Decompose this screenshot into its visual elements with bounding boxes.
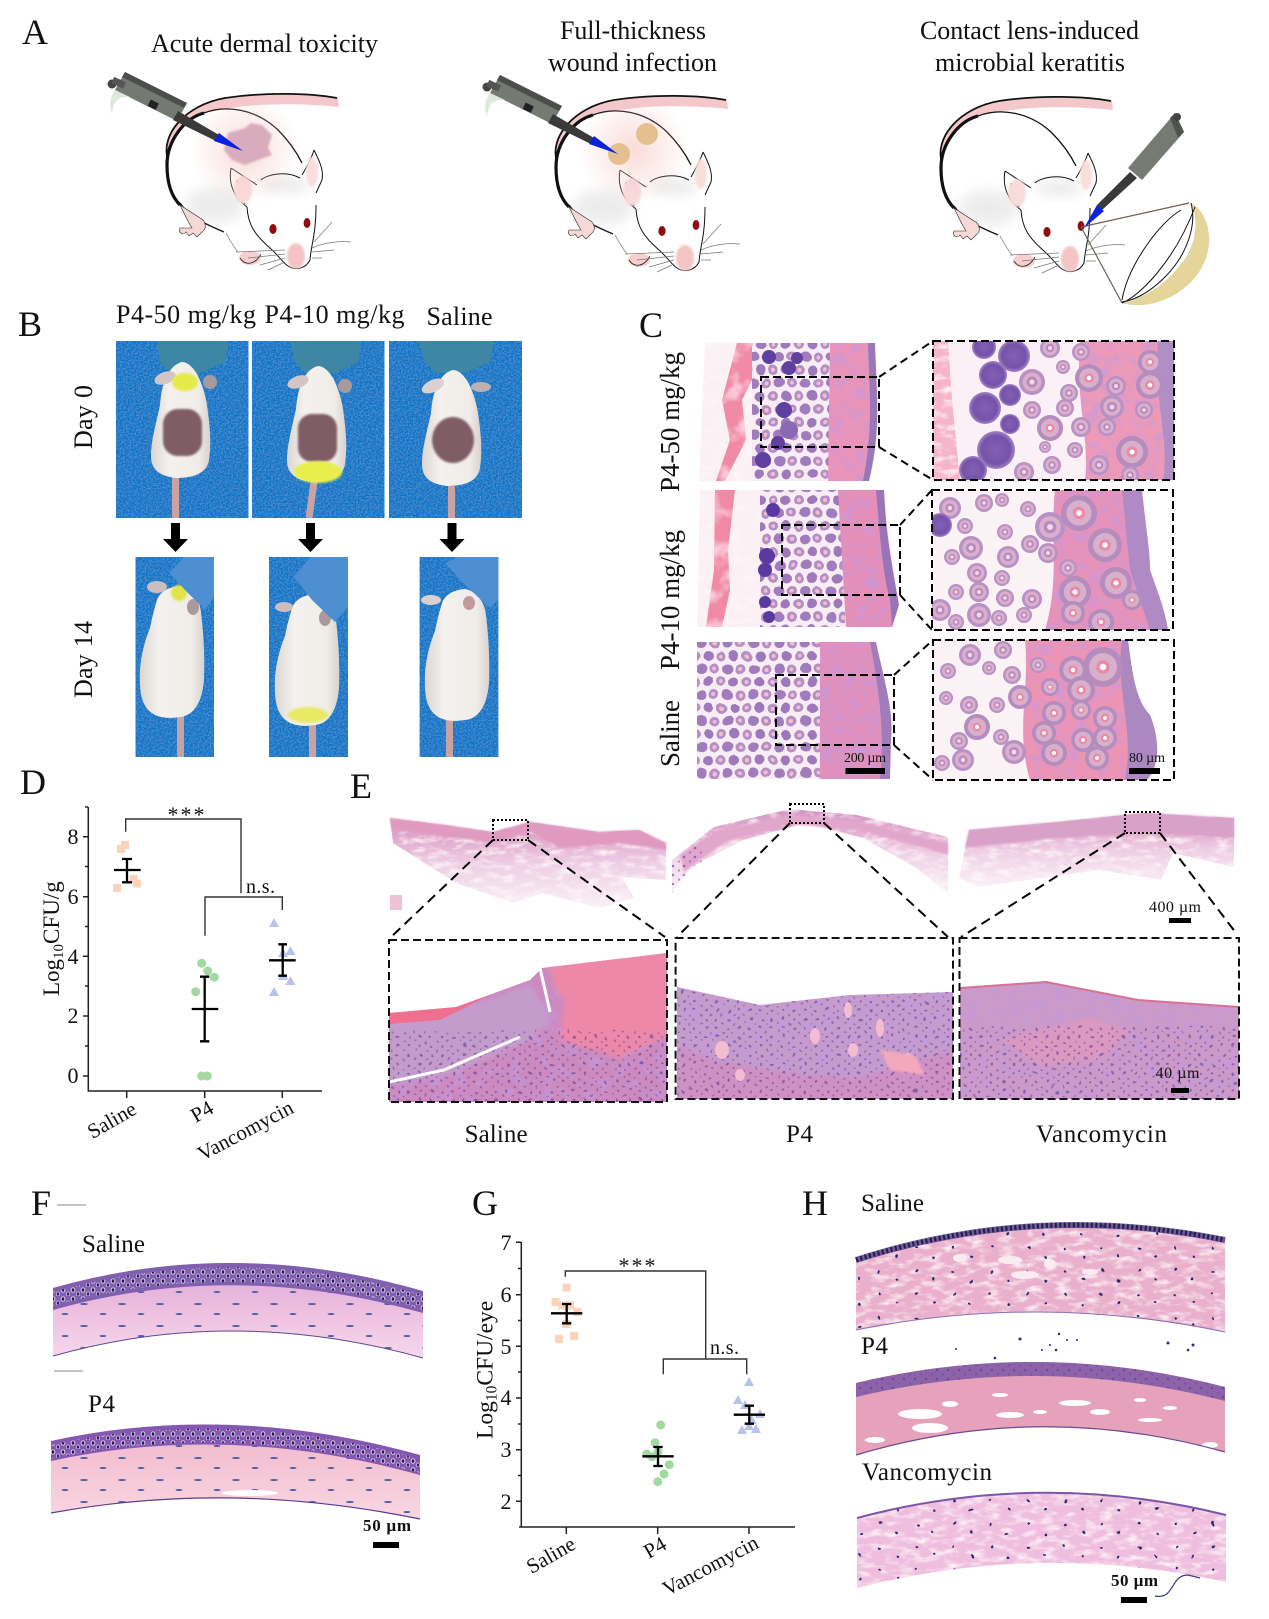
illustration: mouse with wound infection sites — [482, 75, 740, 272]
panel A: mouse models — [22, 12, 1209, 305]
panel B: mouse photographs — [18, 300, 522, 757]
panel letter B: B — [18, 304, 42, 344]
arrow 3 — [440, 523, 464, 552]
y tick labels: 7 — [500, 1230, 512, 1255]
label saline: Saline — [861, 1190, 924, 1217]
magnified saline — [380, 940, 675, 1110]
stray cell dots — [955, 1333, 1194, 1359]
x labels: P4 — [186, 1095, 218, 1127]
axes and ticks — [516, 1242, 795, 1534]
histology overview P4-10 — [697, 485, 899, 635]
panel letter C: C — [639, 305, 663, 345]
P4 data points — [191, 959, 219, 1080]
vancomycin data points — [269, 918, 296, 996]
y tick labels: 3 — [500, 1437, 512, 1462]
saline data points — [552, 1284, 582, 1343]
arrow 1 — [163, 523, 188, 552]
panel F: healthy cornea histology — [31, 1183, 423, 1548]
label saline: Saline — [82, 1231, 145, 1258]
scale bar 400 um: 400 µm — [1149, 899, 1202, 916]
small image artifacts — [54, 1205, 86, 1371]
scale bar 40 um — [1156, 1065, 1200, 1093]
y axis label: Log — [473, 1401, 499, 1439]
panel letter D: D — [20, 762, 46, 802]
x labels: Saline — [522, 1532, 580, 1579]
y axis label: 10 — [484, 1385, 501, 1401]
panel letter H: H — [802, 1183, 828, 1223]
panel E: wound histology — [350, 766, 1245, 1148]
scale bar 80 um: 80 µm — [1129, 751, 1165, 766]
label P4: P4 — [861, 1333, 888, 1360]
label saline: Saline — [465, 1121, 528, 1148]
dotted inset markers — [493, 804, 1160, 840]
x labels: Saline — [83, 1097, 140, 1144]
panel letter F: F — [31, 1183, 51, 1223]
heading: keratitis: Contact lens-induced — [920, 16, 1139, 45]
magnified vancomycin — [955, 938, 1245, 1105]
zoom guide lines — [879, 341, 933, 780]
overview saline — [390, 818, 666, 910]
y tick labels: 8 — [68, 824, 78, 849]
histology overview saline — [697, 642, 892, 779]
inset marker boxes — [761, 377, 900, 745]
y tick labels: 2 — [500, 1489, 512, 1514]
y tick labels: 6 — [68, 884, 78, 909]
section vancomycin — [856, 1492, 1226, 1588]
magnified histology saline — [933, 640, 1174, 780]
scale bar 200 um — [844, 751, 886, 774]
x labels — [83, 1095, 298, 1166]
y tick labels: 4 — [500, 1385, 512, 1410]
error bars — [551, 1304, 765, 1466]
photo: P4-50 day 0 — [116, 341, 248, 518]
n.s. label: n.s. — [710, 1337, 739, 1359]
y tick labels — [68, 824, 78, 1088]
photo: saline day 0 — [389, 341, 522, 518]
row label day 14: Day 14 — [69, 621, 98, 698]
y axis label: CFU/eye — [473, 1301, 499, 1386]
label P4: P4 — [786, 1121, 814, 1148]
x labels: Vancomycin — [193, 1095, 298, 1166]
x labels: P4 — [639, 1531, 671, 1563]
row label day 0: Day 0 — [69, 385, 98, 449]
heading: wound infection: wound infection — [548, 48, 717, 77]
scale bar 40 um: 40 µm — [1156, 1065, 1200, 1082]
photo: P4-10 day 14 — [269, 557, 348, 757]
significance brackets — [565, 1271, 747, 1374]
y tick labels: 6 — [500, 1282, 512, 1307]
vancomycin data points — [733, 1377, 765, 1434]
panel H: infected cornea histology — [802, 1183, 1235, 1603]
significance brackets — [126, 819, 282, 936]
row label P4-50: P4-50 mg/kg — [655, 352, 685, 492]
y tick labels: 5 — [500, 1334, 512, 1359]
row label saline: Saline — [655, 700, 685, 767]
section saline — [855, 1222, 1226, 1332]
panel G: CFU per eye chart — [472, 1183, 795, 1601]
section P4 — [856, 1362, 1225, 1455]
histology overview P4-50 — [699, 343, 878, 481]
scale bar 50 um: 50 µm — [1111, 1571, 1158, 1590]
illustration: mouse with dermal toxicity site — [108, 72, 351, 270]
panel letter A: A — [22, 12, 48, 52]
y tick labels — [500, 1230, 512, 1514]
photo: P4-50 day 14 — [136, 557, 214, 757]
magnified histology P4-50 — [933, 335, 1174, 484]
panel letter G: G — [472, 1183, 498, 1223]
panel D: CFU per gram chart — [20, 762, 322, 1166]
scale bar 50 um — [363, 1516, 411, 1548]
panel C: skin histology — [639, 305, 1174, 785]
heading: acute dermal toxicity: Acute dermal toxicity — [151, 29, 378, 58]
photo: P4-10 day 0 — [252, 341, 384, 518]
panel letter E: E — [350, 766, 372, 806]
label P4: P4 — [88, 1391, 116, 1418]
y tick labels: 0 — [68, 1063, 78, 1088]
saline data points — [113, 841, 141, 892]
zoom guide lines — [390, 823, 1236, 938]
column title P4-50: P4-50 mg/kg — [116, 300, 256, 329]
P4 data points — [642, 1420, 674, 1486]
significance stars: *** — [168, 802, 206, 827]
label vancomycin: Vancomycin — [1036, 1121, 1168, 1148]
column title saline: Saline — [426, 302, 492, 331]
significance stars: *** — [618, 1253, 658, 1278]
axes and ticks — [83, 807, 322, 1098]
overview P4 — [672, 809, 948, 893]
arrow 2 — [298, 523, 323, 552]
row label P4-10: P4-10 mg/kg — [655, 530, 685, 670]
scale bar 50 um: 50 µm — [363, 1516, 411, 1535]
scale bar 50 um — [1111, 1571, 1200, 1603]
n.s. label: n.s. — [246, 876, 275, 898]
error bars — [114, 859, 296, 1041]
label vancomycin: Vancomycin — [862, 1459, 992, 1486]
x labels: Vancomycin — [658, 1530, 763, 1601]
heading: wound infection: Full-thickness — [560, 16, 706, 45]
illustration: mouse with contact lens and pipette — [941, 97, 1209, 305]
section P4 — [51, 1424, 420, 1519]
scale bar 80 um — [1129, 751, 1165, 774]
section saline — [53, 1263, 423, 1358]
magnified P4 — [670, 938, 960, 1105]
magnified histology P4-10 — [928, 490, 1173, 635]
overview vancomycin — [959, 813, 1234, 887]
heading: keratitis: microbial keratitis — [935, 48, 1125, 77]
y tick labels: 2 — [68, 1003, 78, 1028]
y axis label: Log — [39, 959, 64, 996]
column title P4-10: P4-10 mg/kg — [264, 300, 404, 329]
photo: saline day 14 — [420, 557, 498, 757]
x labels — [522, 1530, 763, 1601]
y axis label: CFU/g — [39, 881, 64, 944]
y tick labels: 4 — [68, 944, 78, 969]
scale bar 200 um: 200 µm — [844, 751, 886, 766]
y axis label: 10 — [51, 944, 67, 959]
